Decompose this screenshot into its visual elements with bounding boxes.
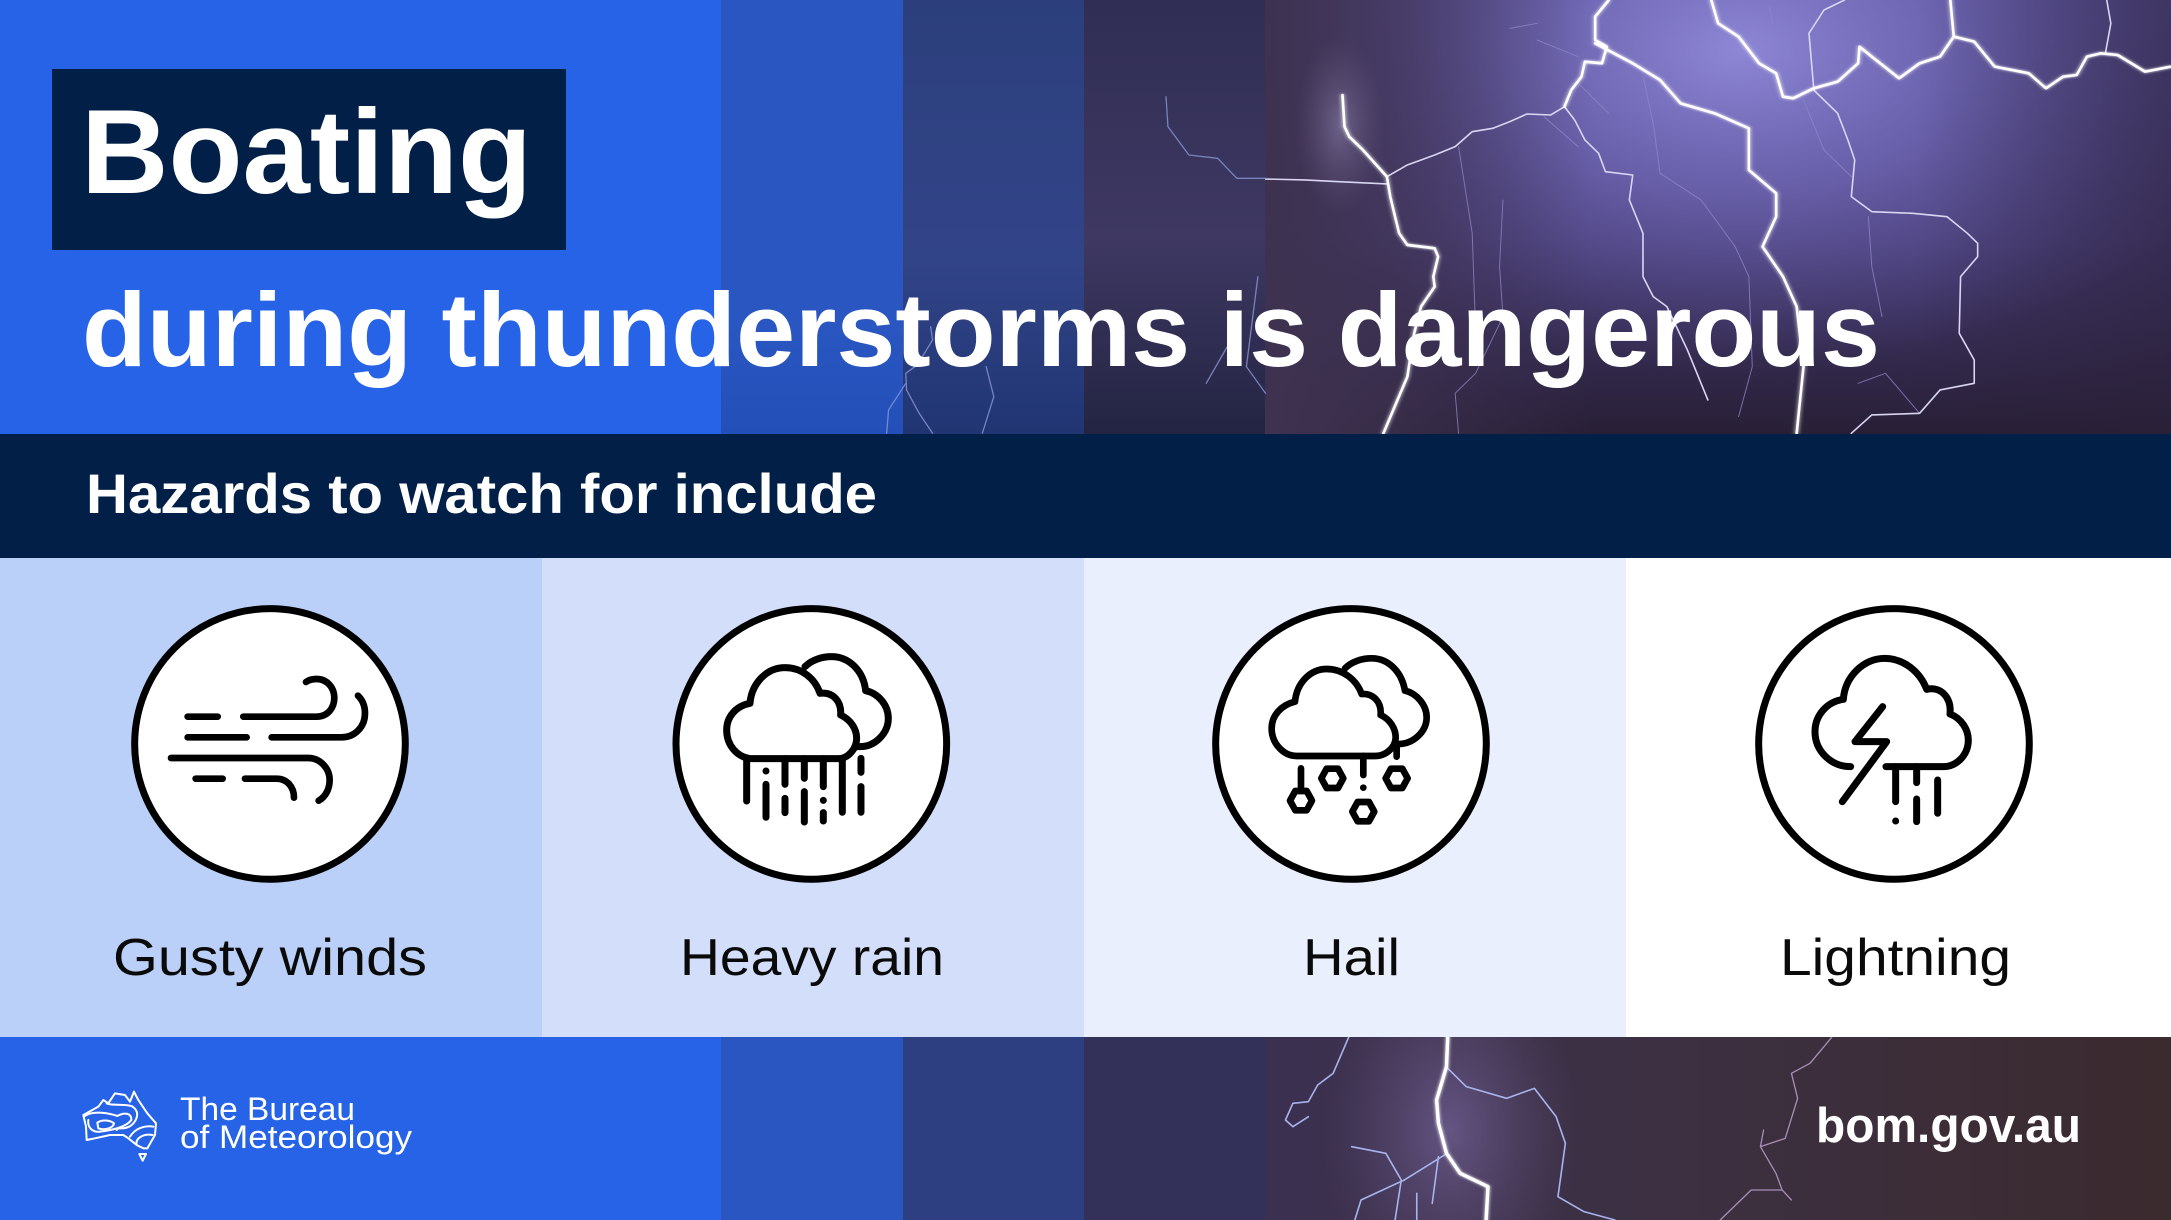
- heading: during thunderstorms is dangerous: during thunderstorms is dangerous: [82, 272, 1880, 389]
- label: heavy rain: Heavy rain: [680, 929, 944, 987]
- band: hazards heading: Hazards to watch for include: [86, 462, 877, 525]
- text: of Meteorology: of Meteorology: [180, 1119, 412, 1155]
- panel: gusty winds: [0, 558, 542, 1037]
- label: lightning: Lightning: [1780, 929, 2011, 987]
- title box: Boating: [52, 69, 566, 250]
- logo: Bureau of Meteorology: [83, 1091, 412, 1161]
- title box: Boating: Boating: [81, 85, 532, 219]
- website: bom.gov.au: bom.gov.au: [1816, 1099, 2081, 1153]
- text: The Bureau: The Bureau: [180, 1091, 355, 1127]
- faint lightning across colour bands: [887, 97, 1266, 433]
- icon: Australia map contours: [83, 1092, 156, 1161]
- panel: footer background: [0, 1037, 2171, 1220]
- band: hazards heading: [0, 434, 2171, 558]
- panel: header background: [0, 0, 2171, 434]
- photo: lightning in footer: [1285, 1037, 1832, 1220]
- icon: storm cloud with bolt: [1759, 609, 2029, 879]
- panel: lightning: [1626, 558, 2171, 1037]
- panel: heavy rain: [542, 558, 1084, 1037]
- icon: rain cloud: [676, 609, 947, 879]
- icon: hail cloud: [1216, 609, 1486, 879]
- panel: hail: [1084, 558, 1626, 1037]
- label: hail: Hail: [1303, 929, 1400, 987]
- label: gusty winds: Gusty winds: [113, 929, 427, 987]
- photo: lightning in header: [1165, 0, 2171, 433]
- icon: wind: [135, 609, 405, 879]
